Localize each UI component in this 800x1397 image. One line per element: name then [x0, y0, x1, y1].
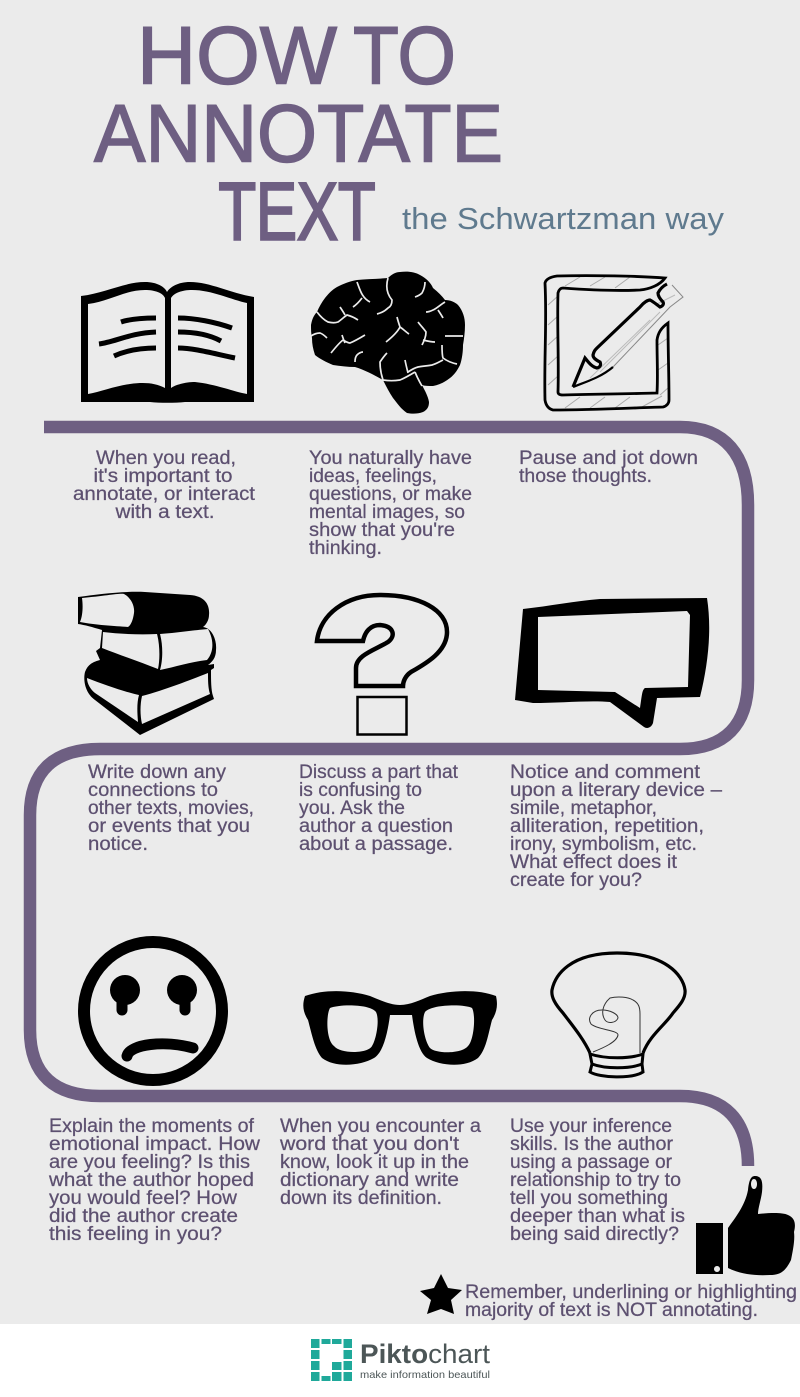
icon: stack of books	[78, 592, 216, 735]
icon: open book	[81, 282, 254, 403]
step 2 text: questions, or make	[309, 484, 472, 505]
step 6 text: simile, metaphor,	[510, 798, 657, 819]
step 4 text: connections to	[88, 780, 218, 801]
step 2 text: mental images, so	[309, 502, 465, 523]
step 5 text: about a passage.	[299, 834, 453, 855]
step 2 text	[309, 448, 472, 559]
step 8 text: word that you don't	[279, 1134, 460, 1155]
step 4 text: Write down any	[88, 762, 227, 783]
step 2 text: show that you're	[309, 520, 455, 541]
step 6 text: upon a literary device –	[510, 780, 722, 801]
step 4 text: notice.	[88, 834, 148, 855]
step 3 text: those thoughts.	[519, 466, 652, 487]
step 7 text	[48, 1116, 260, 1245]
step 9 text: Use your inference	[510, 1116, 672, 1137]
logo mark	[311, 1339, 352, 1381]
step 8 text	[279, 1116, 481, 1209]
icon: sad face	[84, 942, 222, 1080]
step 9 text	[510, 1116, 685, 1245]
closing reminder text: Remember, underlining or highlighting	[465, 1282, 797, 1303]
title: TEXT	[218, 166, 376, 258]
step 2 text: ideas, feelings,	[309, 466, 437, 487]
step 9 text: relationship to try to	[510, 1170, 681, 1191]
step 7 text: did the author create	[49, 1206, 238, 1227]
step 9 text: being said directly?	[510, 1224, 679, 1245]
icon: glasses	[303, 991, 497, 1065]
step 5 text: you. Ask the	[299, 798, 405, 819]
closing reminder text	[465, 1282, 797, 1321]
step 6 text: alliteration, repetition,	[510, 816, 704, 837]
step 6 text: Notice and comment	[510, 762, 701, 783]
step 5 text: is confusing to	[299, 780, 422, 801]
step 5 text: author a question	[299, 816, 453, 837]
step 9 text: skills. Is the author	[510, 1134, 674, 1155]
step 7 text: this feeling in you?	[49, 1224, 222, 1245]
step 4 text: or events that you	[88, 816, 250, 837]
icon: star	[420, 1274, 462, 1314]
title	[94, 10, 503, 258]
step 8 text: know, look it up in the	[280, 1152, 469, 1173]
closing reminder text: majority of text is NOT annotating.	[465, 1300, 758, 1321]
step 3 text: Pause and jot down	[519, 448, 698, 469]
step 5 text	[299, 762, 459, 855]
title: ANNOTATE	[94, 88, 503, 180]
step 1 text: annotate, or interact	[73, 484, 256, 505]
icon: brain	[311, 272, 465, 414]
step 5 text: Discuss a part that	[299, 762, 459, 783]
step 4 text: other texts, movies,	[88, 798, 254, 819]
icon: thumbs up	[696, 1176, 795, 1275]
icon: light bulb	[552, 953, 685, 1077]
step 1 text: When you read,	[96, 448, 236, 469]
step 1 text: with a text.	[114, 502, 214, 523]
logo tagline: make information beautiful	[360, 1369, 490, 1381]
title: HOW	[137, 10, 338, 102]
step 1 text	[73, 448, 256, 523]
winding path line	[30, 427, 748, 1166]
step 6 text: create for you?	[510, 870, 642, 891]
icon: pencil and pad	[545, 276, 683, 410]
step 8 text: When you encounter a	[280, 1116, 481, 1137]
step 7 text: are you feeling? Is this	[49, 1152, 250, 1173]
step 7 text: you would feel? How	[49, 1188, 237, 1209]
footer logo	[311, 1339, 491, 1381]
title: TO	[353, 10, 456, 102]
icon: question mark	[317, 595, 447, 734]
step 3 text	[519, 448, 698, 487]
step 9 text: tell you something	[510, 1188, 668, 1209]
step 8 text: down its definition.	[280, 1188, 442, 1209]
step 2 text: thinking.	[309, 538, 382, 559]
step 4 text	[88, 762, 254, 855]
subtitle: the Schwartzman way	[402, 201, 725, 236]
step 7 text: emotional impact. How	[49, 1134, 260, 1155]
step 1 text: it's important to	[94, 466, 232, 487]
step 6 text: irony, symbolism, etc.	[510, 834, 697, 855]
step 2 text: You naturally have	[309, 448, 472, 469]
step 9 text: deeper than what is	[510, 1206, 685, 1227]
step 6 text	[510, 762, 722, 891]
logo wordmark: Piktochart	[360, 1339, 491, 1369]
step 8 text: dictionary and write	[280, 1170, 459, 1191]
step 9 text: using a passage or	[510, 1152, 673, 1173]
step 7 text: Explain the moments of	[49, 1116, 255, 1137]
step 7 text: what the author hoped	[48, 1170, 254, 1191]
icon: speech bubble	[515, 598, 709, 728]
step 6 text: What effect does it	[510, 852, 678, 873]
